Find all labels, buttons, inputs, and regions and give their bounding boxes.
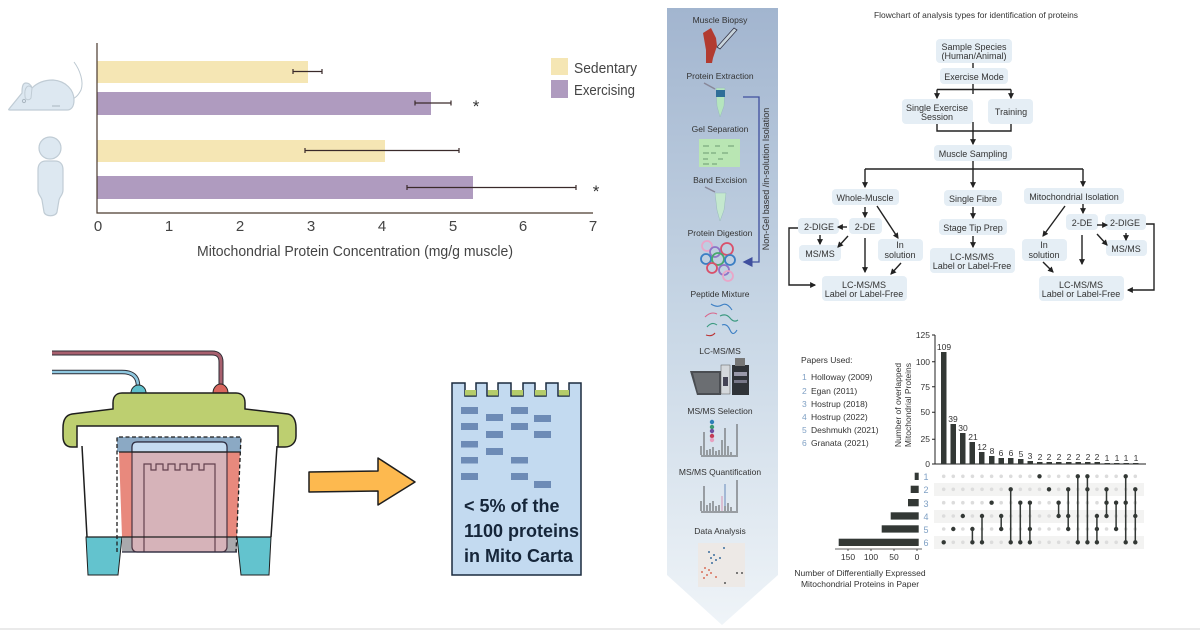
flowchart labels: Single Fibre [949,194,997,204]
teal buffer [86,537,122,575]
step: MS/MS quantification [679,467,761,512]
list: papers used: Egan (2011) [811,386,857,396]
flowchart: analysis types [789,10,1154,301]
intersection bar values: 21 [968,432,978,442]
x axis tick labels: 1 [165,218,173,235]
list: papers used: 2 [802,386,807,396]
set numbers: 1 [923,472,929,482]
legend [551,58,637,99]
flowchart labels: LC-MS/MS [842,280,886,290]
step: gel separation [692,124,749,167]
flowchart labels: Sample Species [941,42,1007,52]
x axis tick labels: 7 [589,218,597,235]
y axis label: Number of overlapped [893,363,903,447]
y axis: 0 [925,459,930,469]
set numbers: 6 [923,538,929,548]
intersection bar values: 12 [977,442,987,452]
flowchart labels: solution [1028,250,1060,260]
list: papers used: Deshmukh (2021) [811,425,879,435]
step: LC-MS/MS: LC-MS/MS [699,346,741,356]
step: protein extraction [686,71,754,117]
chart: upset plot of overlapped mitochondrial proteins [794,330,1146,589]
intersection bar values: 6 [999,448,1004,458]
intersection bar values: 2 [1095,452,1100,462]
gel result text [464,496,579,566]
intersection bar values: 2 [1086,452,1091,462]
x axis tick labels: 6 [519,218,527,235]
x axis tick labels: 0 [94,218,102,235]
step: data analysis: Data Analysis [694,526,746,536]
step: gel separation: Gel Separation [692,124,749,134]
significance stars: * [473,97,480,116]
x axis tick labels: 4 [378,218,386,235]
intersection bar values: 1 [1115,453,1120,463]
list: papers used [801,355,879,448]
flowchart labels: Training [995,107,1027,117]
significance stars [473,97,600,201]
intersection bar values: 30 [958,423,968,433]
step: MS/MS selection: MS/MS Selection [687,406,753,416]
significance stars: * [593,182,600,201]
intersection bar values [937,342,1139,463]
intersection bar values: 2 [1076,452,1081,462]
gel cassette [86,437,271,552]
gel result text: < 5% of the [464,496,560,516]
set size axis: 0 [915,552,920,562]
flowchart labels: 2-DIGE [1110,218,1140,228]
intersection bars [941,352,1138,464]
set numbers: 3 [923,499,929,509]
arrow: tank to gel result [309,458,415,505]
flowchart labels: MS/MS [1111,244,1141,254]
intersection bar values: 1 [1124,453,1129,463]
set numbers: 4 [923,512,929,522]
flowchart labels: MS/MS [805,249,835,259]
flowchart labels: Whole-Muscle [836,193,894,203]
connectors [131,385,146,393]
intersection bar values: 1 [1134,453,1139,463]
step: MS/MS quantification: MS/MS Quantification [679,467,761,477]
intersection bar values: 2 [1038,452,1043,462]
wires [52,353,221,386]
list: papers used: 1 [802,372,807,382]
x axis tick labels [94,218,597,235]
flowchart title: Flowchart of analysis types for identification of proteins [874,10,1078,20]
flowchart labels: Label or Label-Free [933,261,1011,271]
intersection bar values: 2 [1047,452,1052,462]
bar chart: mitochondrial protein concentration [9,43,637,260]
arrow: non-gel based route [743,97,759,262]
set size axis title [794,568,926,589]
step: protein digestion: Protein Digestion [688,228,753,238]
step: band excision: Band Excision [693,175,747,185]
set size bars [839,473,919,546]
intersection bar values: 39 [948,414,958,424]
x axis tick labels: 3 [307,218,315,235]
flowchart arrows [789,63,1154,290]
y axis: 75 [921,382,930,392]
icon: person [38,137,63,216]
flowchart labels: Label or Label-Free [825,289,903,299]
flowchart labels: Label or Label-Free [1042,289,1120,299]
list: papers used: 5 [802,425,807,435]
intersection bar values: 3 [1028,451,1033,461]
flowchart labels: LC-MS/MS [950,252,994,262]
axes [97,43,593,213]
flowchart labels: In [1040,240,1048,250]
y axis: 50 [921,407,930,417]
intersection bar values: 2 [1067,452,1072,462]
set numbers: 2 [923,485,929,495]
list: papers used: 6 [802,438,807,448]
flowchart labels: 2-DE [855,222,875,232]
lid [63,393,296,447]
legend: Exercising [574,82,635,99]
y axis label: Mitochondrial Proteins [903,363,913,447]
x axis title: Mitochondrial Protein Concentration (mg/g muscle) [197,243,513,260]
step: peptide mixture [690,289,750,336]
flowchart labels: LC-MS/MS [1059,280,1103,290]
icon: mouse [9,62,82,110]
flowchart labels: Session [921,112,953,122]
step: LC-MS/MS [690,346,749,395]
list: papers used: 4 [802,412,807,422]
list: papers used: 3 [802,399,807,409]
flowchart labels: Exercise Mode [944,72,1004,82]
flowchart labels: 2-DIGE [804,222,834,232]
flowchart boxes [798,39,1147,301]
list: papers used: Hostrup (2018) [811,399,868,409]
flowchart labels: Muscle Sampling [939,149,1007,159]
y axis label [893,363,913,447]
flowchart labels: solution [884,250,916,260]
y axis: 25 [921,434,930,444]
flowchart labels: Stage Tip Prep [943,223,1003,233]
intersection bar values: 8 [990,446,995,456]
flowchart labels: 2-DE [1072,218,1092,228]
intersection bar values: 2 [1057,452,1062,462]
intersection bar values: 1 [1105,453,1110,463]
connecting lines [972,476,1135,542]
error bars [293,69,576,190]
bars [97,61,473,199]
step: muscle biopsy: Muscle Biopsy [693,15,748,25]
flowchart labels: In [896,240,904,250]
intersection bar values: 5 [1019,449,1024,459]
list: papers used: Granata (2021) [811,438,869,448]
step: peptide mixture: Peptide Mixture [690,289,750,299]
gel result text: in Mito Carta [464,546,574,566]
x axis tick labels: 2 [236,218,244,235]
intersection bar values: 109 [937,342,951,352]
list: papers used: Papers Used: [801,355,852,365]
matrix dots [942,474,1138,544]
intersection matrix [934,474,1144,549]
y axis [916,330,1146,469]
list: papers used: Hostrup (2022) [811,412,868,422]
flowchart labels: Mitochondrial Isolation [1029,192,1119,202]
gel result text: 1100 proteins [464,521,579,541]
step: band excision [693,175,747,221]
legend: Sedentary [574,60,637,77]
y axis: 125 [916,330,930,340]
panel: proteomics workflow ribbon [667,8,778,625]
set size axis: 50 [889,552,899,562]
flowchart labels: (Human/Animal) [941,51,1007,61]
step: muscle biopsy [693,15,748,63]
set size axis [835,549,922,562]
intersection bar values: 6 [1009,448,1014,458]
step: protein extraction: Protein Extraction [686,71,754,81]
step: data analysis [694,526,746,587]
label: non-gel route: Non-Gel based /in-solution Isolation [761,108,771,250]
tank body [82,446,277,537]
flowchart labels: Single Exercise [906,103,968,113]
set size axis: 150 [841,552,855,562]
set size axis title: Mitochondrial Proteins in Paper [801,579,919,589]
flowchart labels [804,42,1141,299]
step: MS/MS selection [687,406,753,456]
step: protein digestion [688,228,753,281]
list: papers used: Holloway (2009) [811,372,873,382]
x axis tick labels: 5 [449,218,457,235]
illustration: gel electrophoresis tank [52,353,296,575]
y axis: 100 [916,357,930,367]
wells [465,390,569,396]
set size axis: 100 [864,552,878,562]
gel bands [461,407,551,488]
set numbers [923,472,929,548]
set size axis title: Number of Differentially Expressed [794,568,926,578]
panel: gel result [452,383,581,575]
set numbers: 5 [923,525,929,535]
